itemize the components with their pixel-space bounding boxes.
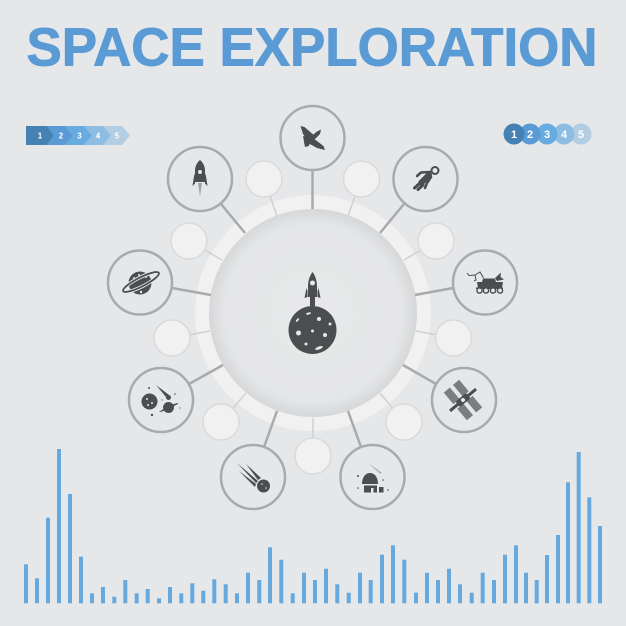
- circle step indicator: 3: [544, 129, 550, 141]
- icon: central rocket and moon: [288, 272, 336, 354]
- circle step indicator: 2: [527, 129, 533, 141]
- bar chart: [24, 449, 602, 603]
- icon: observatory: [357, 463, 389, 492]
- icon: space shuttle: [300, 126, 325, 150]
- title: SPACE EXPLORATION: [26, 18, 598, 78]
- arrow step indicator: 2: [59, 132, 64, 140]
- circle step indicator: 1: [511, 129, 517, 141]
- icon: rocket: [192, 160, 208, 197]
- icon: planets and comet: [142, 385, 181, 416]
- icon: rover: [467, 272, 504, 293]
- central disc: [209, 209, 417, 417]
- central ring: [195, 195, 431, 431]
- small empty circles: [154, 161, 472, 474]
- connector lines: large circles: [172, 170, 453, 447]
- icon: meteor: [237, 463, 270, 492]
- connector lines: small circles: [172, 179, 453, 456]
- arrow step indicator: 3: [77, 132, 82, 140]
- circle step indicator: 4: [561, 129, 568, 141]
- icon: astronaut: [414, 167, 438, 190]
- circle step indicator: [504, 124, 592, 144]
- circle step indicator: 5: [578, 129, 584, 141]
- arrow step indicator: 5: [115, 132, 120, 140]
- large icon circles: [108, 106, 517, 509]
- arrow step indicator: 4: [96, 132, 101, 140]
- icon: ringed planet: [121, 269, 161, 295]
- arrow step indicator: 1: [38, 132, 43, 140]
- icon: space station: [438, 375, 488, 425]
- arrow step indicator: [26, 126, 130, 145]
